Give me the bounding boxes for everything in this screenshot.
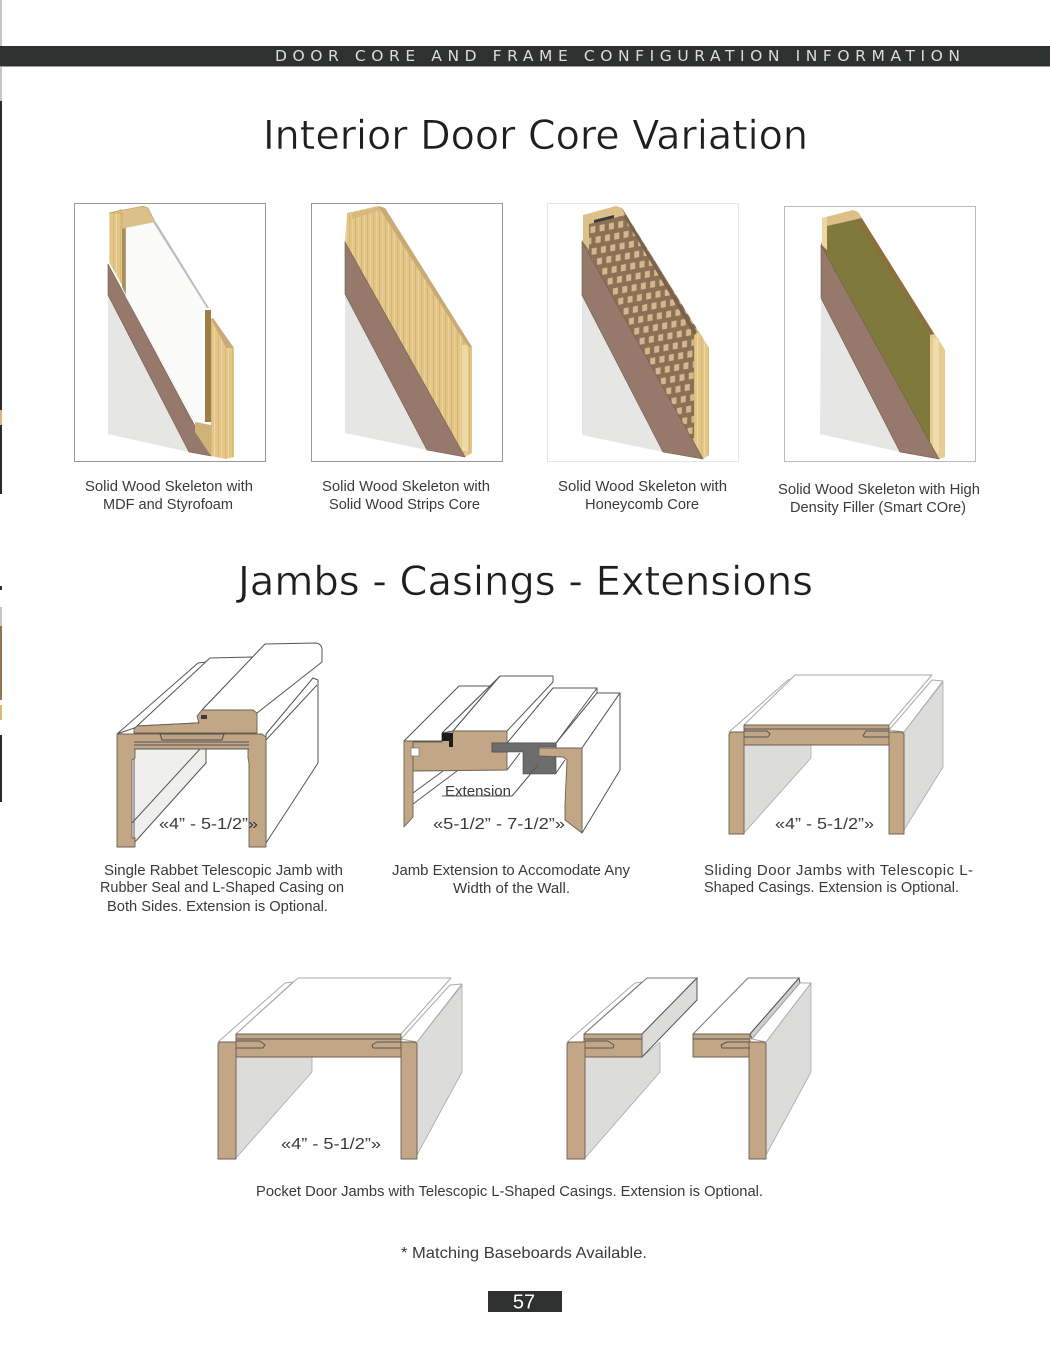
panel: high density filler door core — [784, 206, 976, 462]
diagram: single rabbet telescopic jamb — [117, 643, 322, 847]
caption: jamb extension — [392, 862, 630, 897]
caption: jamb extension: Width of the Wall. — [453, 880, 570, 897]
caption: sliding door jambs — [704, 862, 973, 896]
caption: single rabbet jamb: Rubber Seal and L-Shaped Casing on — [100, 879, 344, 896]
caption: honeycomb: Solid Wood Skeleton with — [558, 478, 727, 495]
diagram: pocket door jamb double — [567, 978, 811, 1159]
page number — [488, 1291, 562, 1314]
caption: honeycomb: Honeycomb Core — [585, 496, 699, 513]
caption: high density filler: Solid Wood Skeleton with High — [778, 481, 980, 498]
caption: single rabbet jamb: Single Rabbet Telescopic Jamb with — [104, 862, 343, 879]
dimension label: «4” - 5-1/2”» — [281, 1136, 381, 1153]
caption: high density filler — [778, 481, 980, 516]
header band — [0, 46, 1050, 67]
title: interior door core variation: Interior Door Core Variation — [263, 113, 808, 159]
door section drawing — [345, 206, 472, 457]
caption: MDF and styrofoam — [85, 478, 253, 513]
caption: high density filler: Density Filler (Smart COre) — [790, 499, 966, 516]
dimension label: «4” - 5-1/2”» — [159, 816, 258, 833]
page number: 57 — [513, 1292, 535, 1314]
panel: solid wood strips door core — [312, 204, 502, 462]
caption: MDF and styrofoam: MDF and Styrofoam — [103, 496, 233, 513]
dimension label: «5-1/2” - 7-1/2”» — [433, 816, 565, 833]
extension label and leader — [442, 765, 538, 800]
caption: single rabbet jamb — [100, 862, 344, 915]
panel: honeycomb door core — [548, 204, 738, 462]
left edge strip — [0, 0, 2, 802]
door section drawing — [108, 206, 234, 459]
caption: solid wood strips: Solid Wood Skeleton with — [322, 478, 490, 495]
extension label and leader: Extension — [445, 783, 511, 800]
door section drawing — [582, 206, 709, 459]
caption: solid wood strips: Solid Wood Strips Core — [329, 496, 480, 513]
caption: sliding door jambs: Sliding Door Jambs with Telescopic L- — [704, 862, 973, 879]
panel frame — [312, 204, 502, 462]
caption: solid wood strips — [322, 478, 490, 513]
door section drawing — [820, 210, 945, 459]
header band: DOOR CORE AND FRAME CONFIGURATION INFORMATION — [275, 47, 960, 65]
note: matching baseboards: * Matching Baseboards Available. — [401, 1245, 647, 1262]
caption: single rabbet jamb: Both Sides. Extension is Optional. — [107, 898, 328, 915]
dimension label: «4” - 5-1/2”» — [775, 816, 874, 833]
title: jambs casings extensions: Jambs - Casings - Extensions — [235, 559, 813, 605]
caption: MDF and styrofoam: Solid Wood Skeleton with — [85, 478, 253, 495]
panel frame — [548, 204, 738, 462]
panel: MDF and styrofoam door core — [74, 204, 266, 462]
diagram: sliding door jamb — [729, 675, 943, 834]
caption: jamb extension: Jamb Extension to Accomodate Any — [392, 862, 630, 879]
caption: honeycomb — [558, 478, 727, 513]
diagram: jamb with extension — [404, 676, 620, 833]
caption: pocket door jambs: Pocket Door Jambs with Telescopic L-Shaped Casings. Extension is Optional. — [256, 1183, 763, 1200]
panel frame — [74, 204, 266, 462]
diagram: pocket door jamb single — [218, 978, 462, 1159]
panel frame — [784, 206, 976, 462]
caption: sliding door jambs: Shaped Casings. Extension is Optional. — [704, 879, 959, 896]
